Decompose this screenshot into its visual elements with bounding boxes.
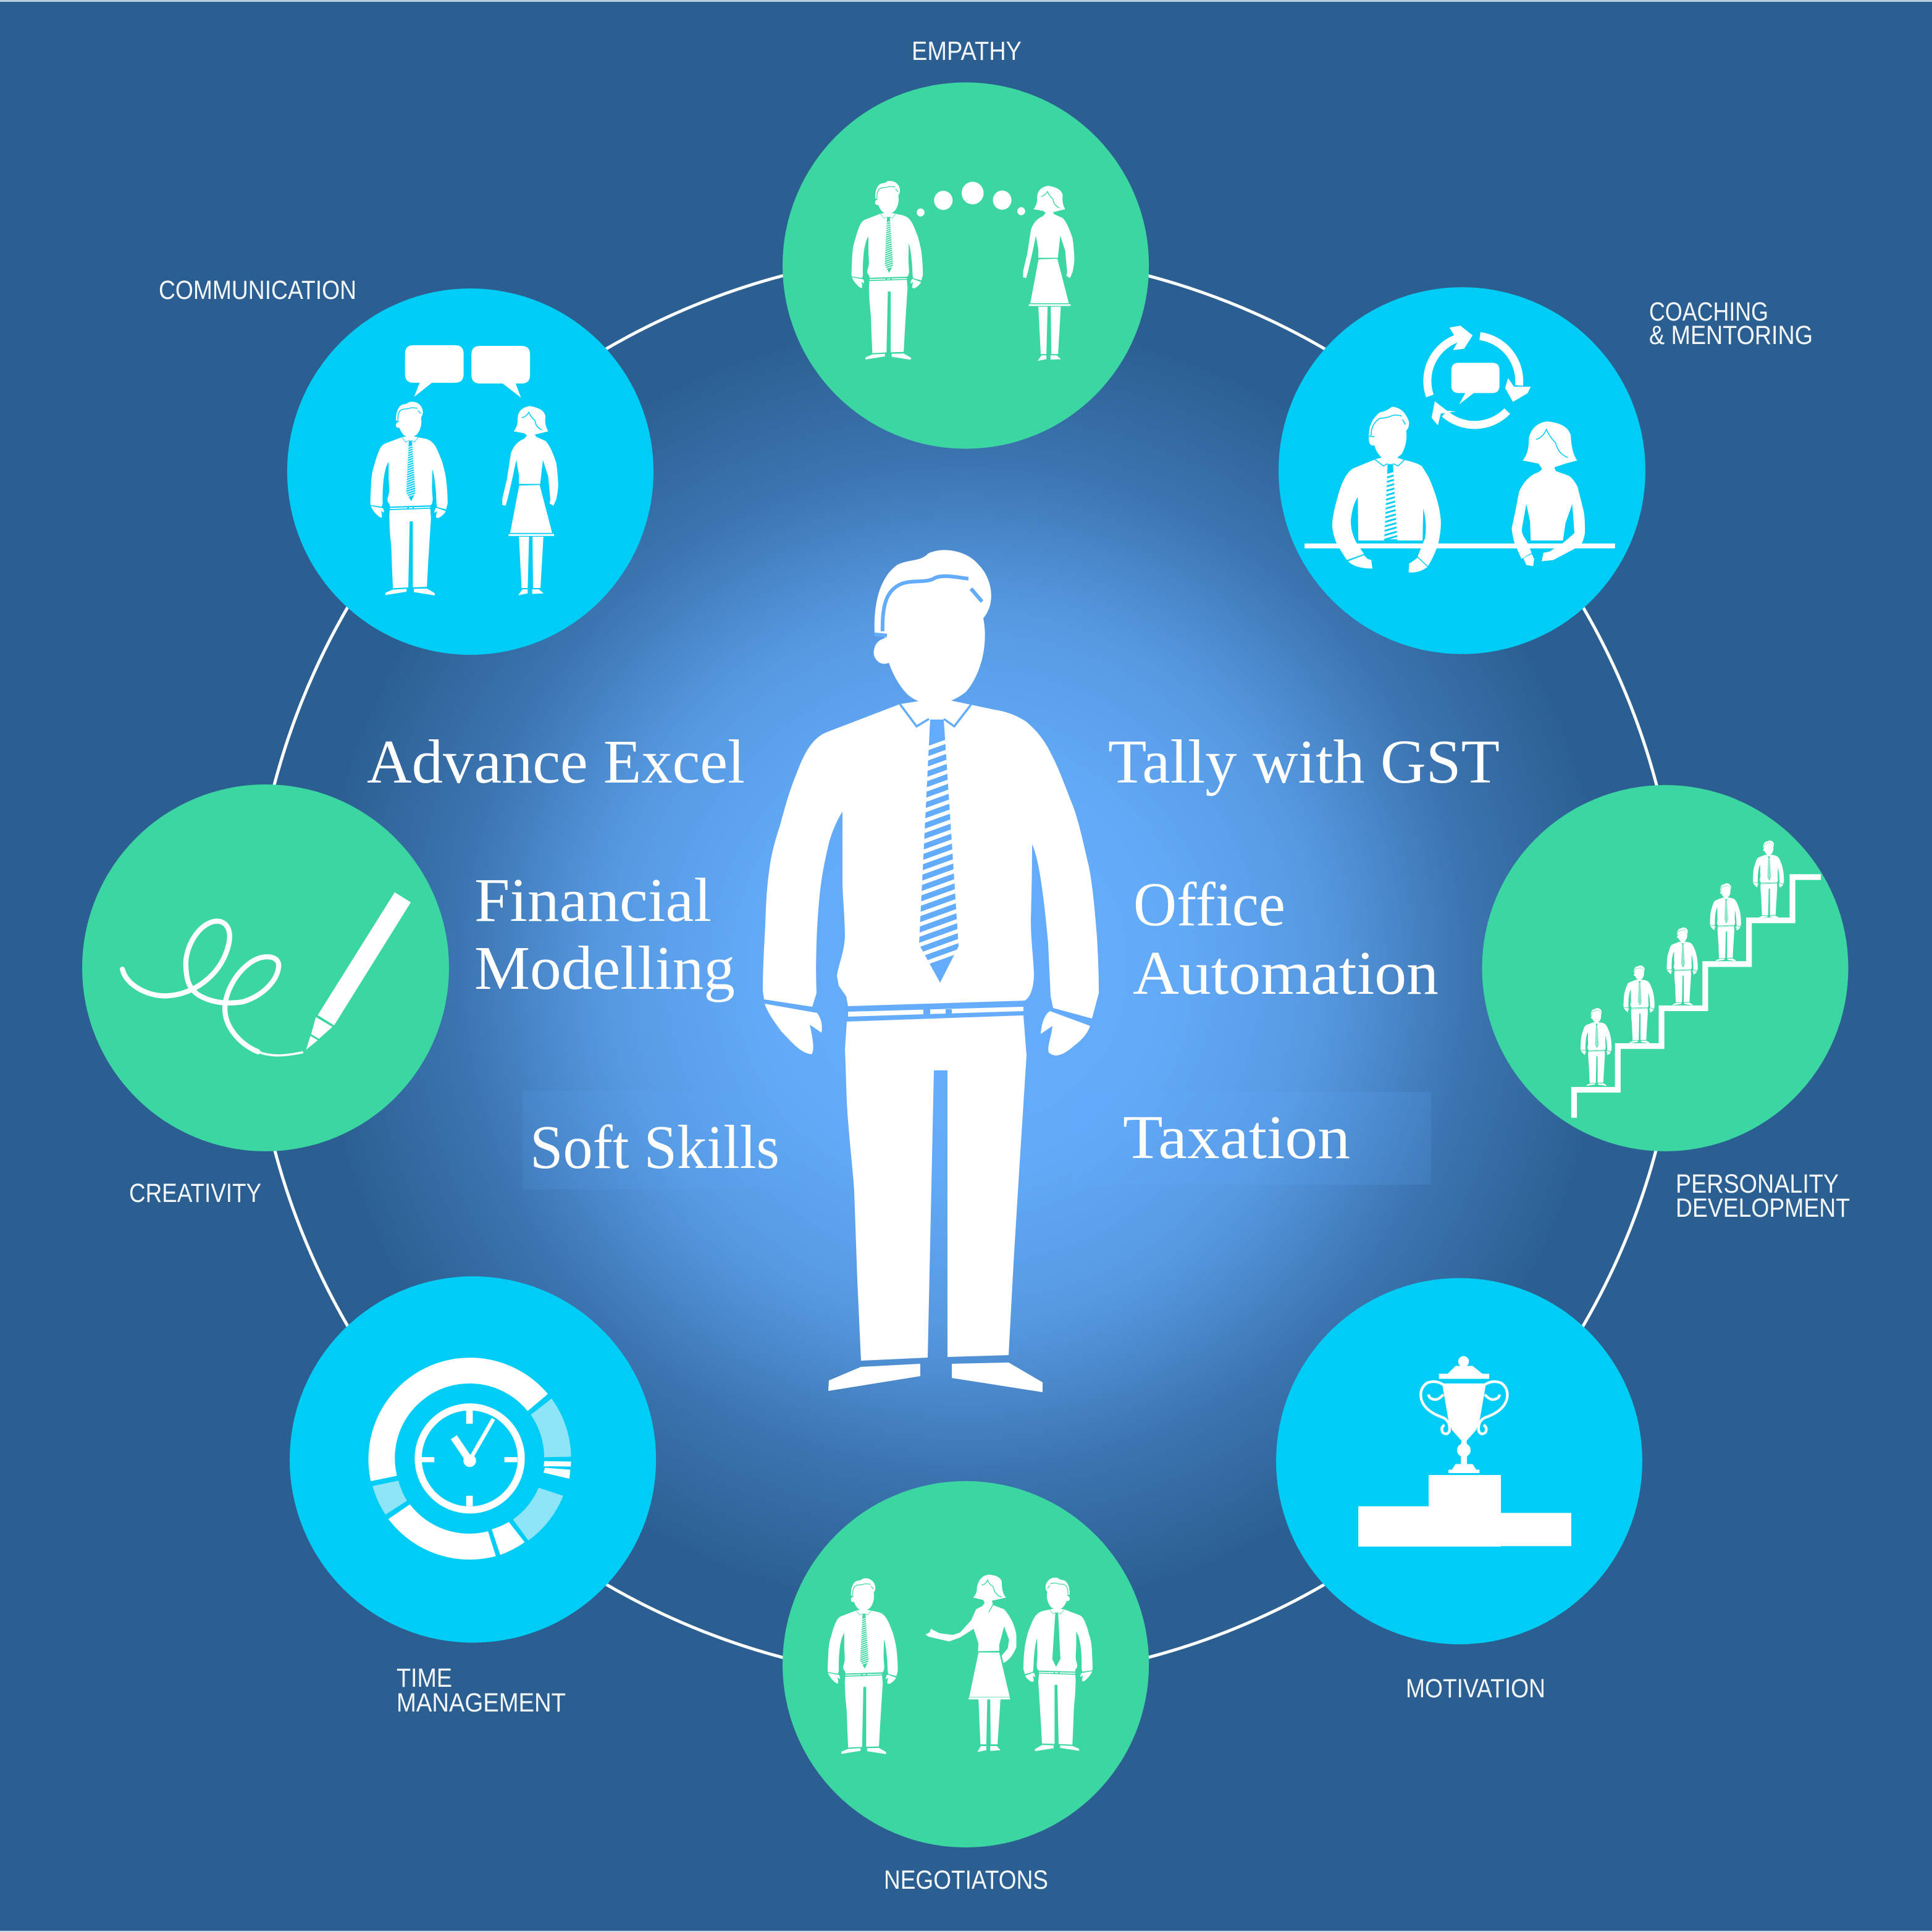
icon: pen and squiggle (122, 892, 411, 1056)
center skill: Advance Excel: Advance Excel (367, 727, 745, 796)
label: creativity: CREATIVITY (129, 1178, 261, 1208)
center skill: Taxation: Taxation (1123, 1102, 1350, 1172)
label: empathy: EMPATHY (912, 36, 1022, 66)
central businessman figure (763, 550, 1099, 1392)
icon: seated man (1332, 406, 1441, 573)
label: personality development: PERSONALITY (1676, 1169, 1839, 1199)
panel: negotiations (783, 1481, 1149, 1847)
label: coaching and mentoring: COACHING (1649, 297, 1768, 327)
label: personality development (1676, 1169, 1850, 1223)
icon: mentoring scene (1304, 326, 1615, 573)
icon: man thinking (852, 181, 923, 360)
center skill: Office Automation (1133, 870, 1438, 1007)
icon: trophy on podium (1358, 1356, 1571, 1547)
label: communication: COMMUNICATION (159, 275, 356, 305)
center skill: Financial Modelling: Modelling (474, 933, 735, 1002)
icon: right man (1023, 1577, 1093, 1751)
label: personality development: DEVELOPMENT (1676, 1193, 1850, 1223)
panel: empathy (783, 82, 1149, 449)
highlight box behind Taxation (1072, 1092, 1431, 1185)
panel: time management (290, 1276, 656, 1643)
icon: left man (828, 1578, 898, 1754)
icon: woman (502, 406, 558, 595)
center skill: Soft Skills: Soft Skills (530, 1112, 779, 1182)
label: negotiations: NEGOTIATONS (884, 1865, 1048, 1895)
panel: personality development (1482, 785, 1848, 1151)
label: time management (397, 1663, 566, 1718)
icon: thought bubbles (917, 182, 1025, 217)
panel: creativity (82, 784, 449, 1151)
icon: man (371, 401, 448, 595)
connecting ring (251, 252, 1680, 1681)
label: time management: MANAGEMENT (397, 1688, 566, 1718)
icon: speech bubbles (405, 345, 530, 398)
icon: woman gesturing (925, 1574, 1017, 1752)
center skill: Office Automation: Automation (1133, 938, 1438, 1007)
panel: motivation (1276, 1278, 1642, 1644)
icon: woman (1023, 186, 1074, 361)
label: motivation: MOTIVATION (1406, 1674, 1545, 1703)
icon: climbing men (1581, 841, 1784, 1086)
icon: table line (1304, 544, 1615, 548)
label: time management: TIME (397, 1663, 452, 1693)
label: coaching and mentoring (1649, 297, 1813, 350)
center skill: Financial Modelling: Financial (474, 865, 712, 934)
icon: clock with segmented ring (368, 1358, 571, 1560)
panel: coaching and mentoring (1279, 287, 1645, 654)
center skill: Tally with GST: Tally with GST (1108, 727, 1500, 796)
highlight box behind Soft Skills (523, 1091, 798, 1190)
icon: seated woman (1511, 421, 1585, 566)
center skill: Financial Modelling (474, 865, 735, 1002)
center skill: Office Automation: Office (1133, 870, 1285, 939)
panel: communication (287, 288, 653, 655)
label: coaching and mentoring: & MENTORING (1649, 321, 1813, 350)
icon: staircase (1574, 877, 1821, 1118)
icon: cycle arrows (1427, 326, 1531, 426)
